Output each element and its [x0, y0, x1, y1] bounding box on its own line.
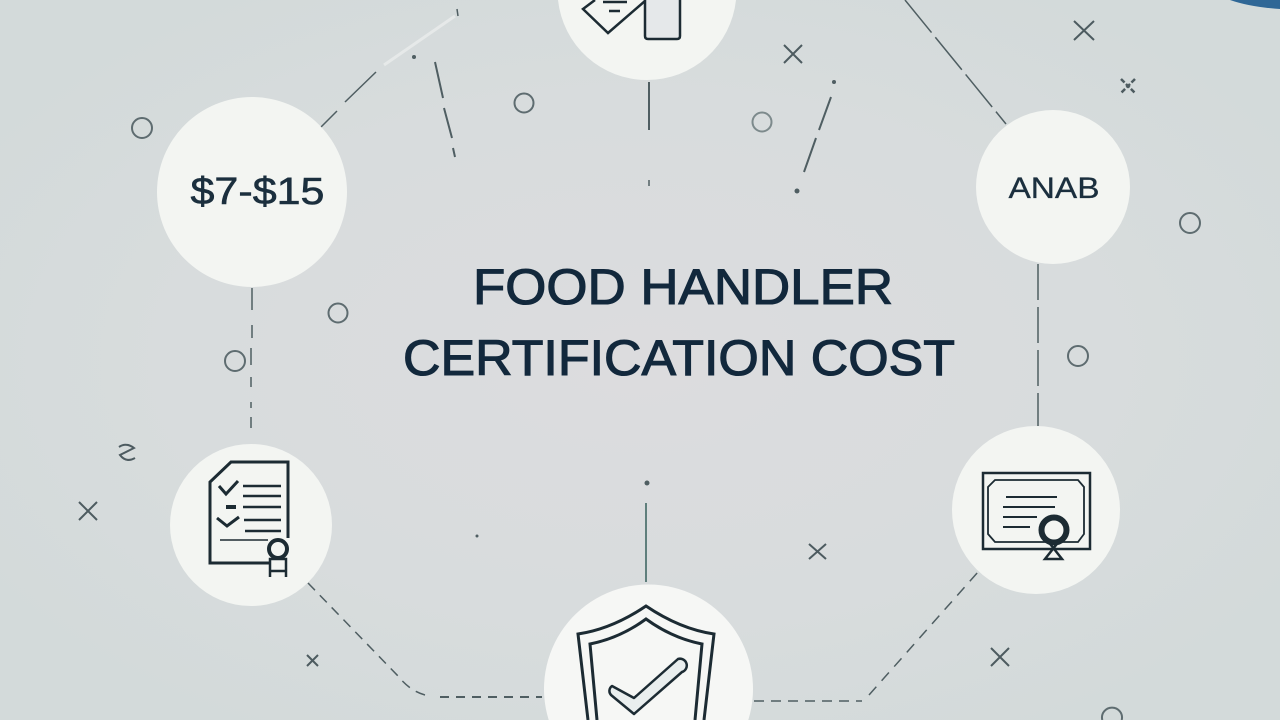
decorative crosses — [79, 21, 1135, 666]
dashed connector lines — [251, 0, 1038, 701]
node: ANAB — [976, 110, 1130, 264]
title: CERTIFICATION COST — [403, 330, 955, 386]
title: FOOD HANDLER — [473, 259, 893, 315]
title — [403, 259, 955, 386]
node: shield check icon — [544, 585, 753, 720]
node: certificate icon — [952, 426, 1120, 594]
node: checklist document icon — [170, 444, 332, 606]
corner accent — [1230, 0, 1280, 9]
decorative rings — [132, 94, 1200, 720]
node: price range — [157, 97, 347, 287]
node: price range: $7-$15 — [190, 171, 324, 213]
node: top price tags icon — [558, 0, 736, 80]
node: ANAB: ANAB — [1008, 172, 1100, 205]
small connector dots — [412, 55, 836, 538]
